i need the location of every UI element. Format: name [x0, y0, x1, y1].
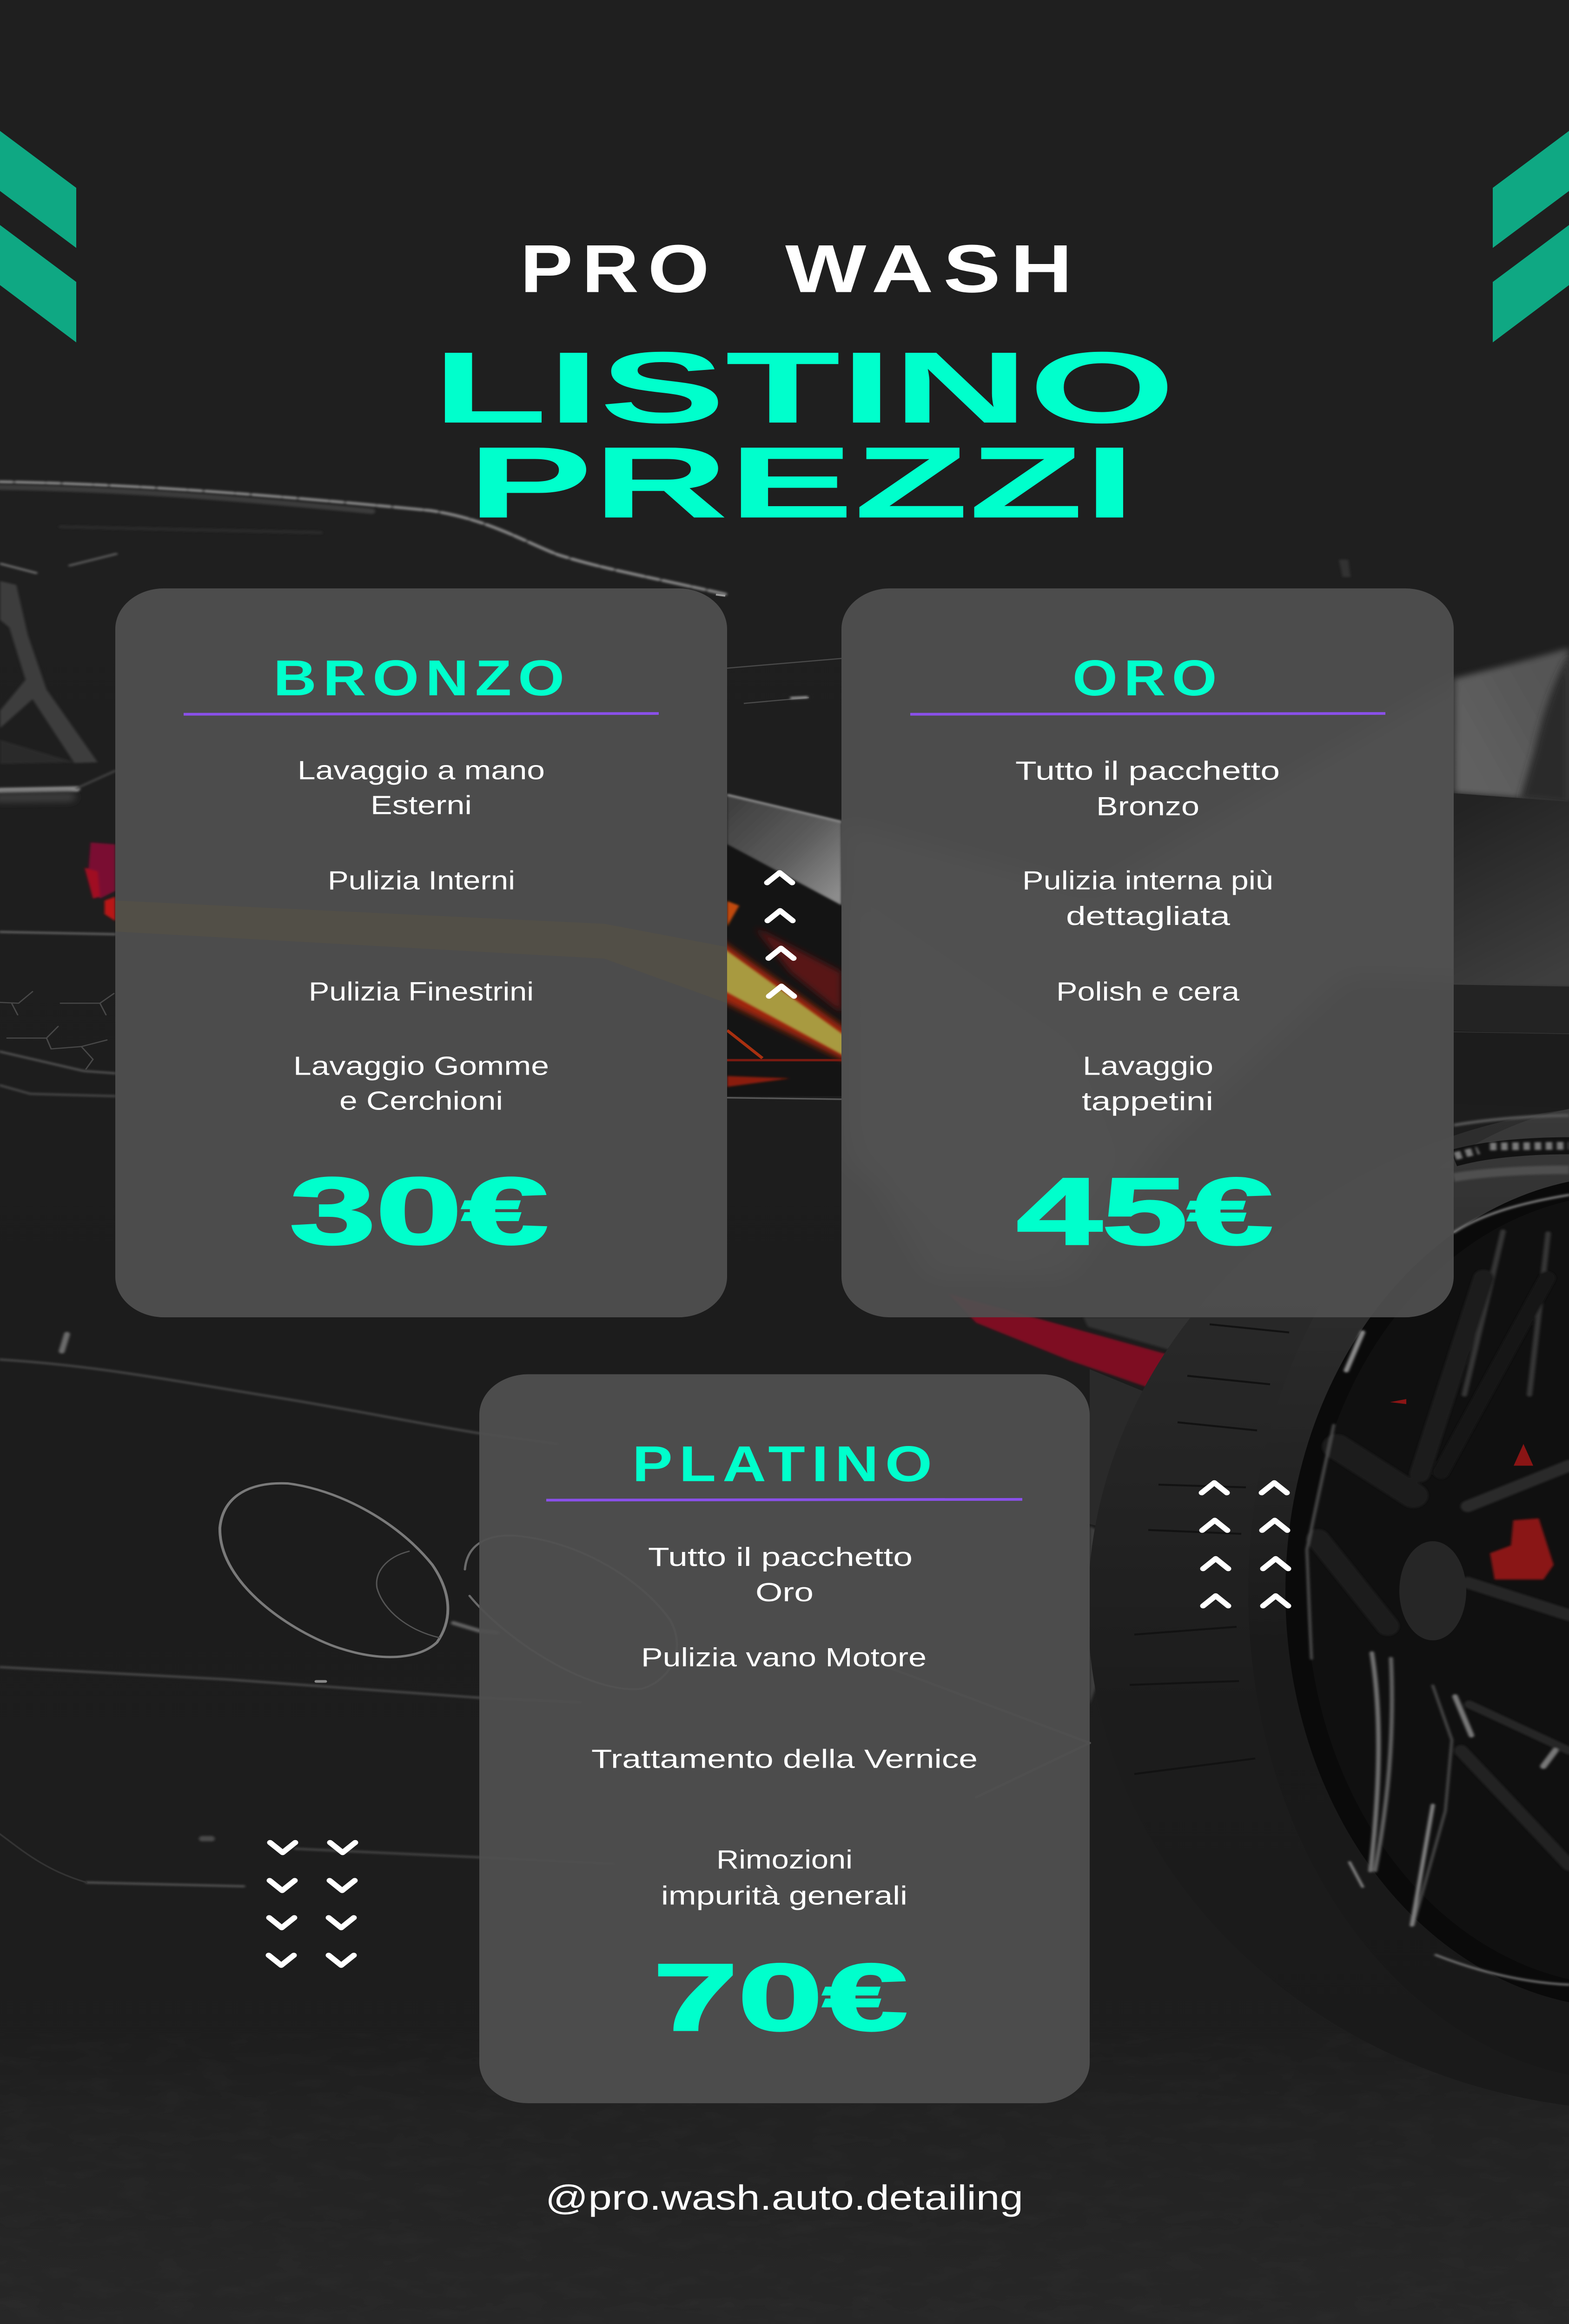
item: lavaggio gomme e cerchioni [293, 1051, 549, 1116]
panel: oro [841, 588, 1454, 1317]
title: PREZZI [467, 426, 1136, 539]
price: 30 euro: 30€ [290, 1158, 548, 1264]
icon: double chevrons down on left [269, 1842, 355, 1965]
exhaust and lower bumper lines [0, 1334, 1090, 1886]
icon: chevrons up between top cards [767, 873, 794, 996]
social handle: @pro.wash.auto.detailing [545, 2178, 1023, 2217]
title [432, 331, 1175, 539]
item: tutto il pacchetto bronzo [1015, 756, 1280, 821]
item: tutto il pacchetto bronzo: Tutto il pacchetto [1015, 756, 1280, 786]
item: polish e cera: Polish e cera [1056, 977, 1239, 1006]
fender and right body [1339, 560, 1569, 1108]
brand name: WASH [785, 231, 1082, 307]
upper thin lines between cards [716, 594, 841, 703]
item: lavaggio tappetini: Lavaggio [1083, 1051, 1213, 1081]
left body lines and tail-light [0, 771, 115, 1096]
decorative teal stripes top right [1493, 131, 1569, 343]
title: LISTINO [432, 331, 1175, 444]
light streak seen through card [115, 901, 727, 1003]
decorative teal stripes top left [0, 131, 76, 343]
rear wing carbon edge [0, 482, 725, 594]
item: pulizia interni: Pulizia Interni [328, 866, 515, 895]
heading: bronzo: BRONZO [273, 650, 571, 706]
panel: bronzo [115, 588, 727, 1317]
heading: platino: PLATINO [632, 1436, 939, 1492]
item: lavaggio tappetini: tappetini [1082, 1087, 1213, 1116]
wing support strut [0, 563, 98, 764]
panel: platino [479, 1374, 1090, 2103]
tail-light between cards [727, 793, 841, 1100]
item: pulizia interna più dettagliata: dettagliata [1066, 901, 1230, 931]
item: pulizia finestrini: Pulizia Finestrini [309, 977, 534, 1006]
item: tutto il pacchetto oro: Tutto il pacchetto [648, 1542, 913, 1572]
item: tutto il pacchetto bronzo: Bronzo [1096, 792, 1199, 821]
item: trattamento della vernice: Trattamento della Vernice [591, 1744, 978, 1774]
item: tutto il pacchetto oro [648, 1542, 913, 1607]
item: rimozioni impurità generali: Rimozioni [716, 1845, 853, 1875]
item: pulizia interna più dettagliata: Pulizia interna più [1022, 866, 1273, 895]
item: lavaggio tappetini [1082, 1051, 1213, 1116]
wheel rim with spokes and brake caliper [1285, 1175, 1569, 2008]
price: 70 euro: 70€ [653, 1944, 907, 2050]
item: tutto il pacchetto oro: Oro [755, 1578, 814, 1607]
faint car body behind oro card [841, 651, 1569, 1278]
item: lavaggio a mano esterni [298, 756, 545, 820]
item: pulizia vano motore: Pulizia vano Motore [641, 1643, 927, 1672]
icon: double chevrons up on tyre [1202, 1483, 1288, 1606]
brand name [520, 231, 1082, 307]
heading: oro: ORO [1072, 650, 1223, 706]
background: dark photo of sports car rear with wheel [0, 479, 1569, 2324]
price: 45 euro: 45€ [1017, 1158, 1273, 1264]
rear red reflector [948, 1294, 1204, 1704]
brand name: PRO [520, 231, 718, 307]
item: lavaggio gomme e cerchioni: Lavaggio Gomme [293, 1051, 549, 1081]
item: pulizia interna più dettagliata [1022, 866, 1273, 931]
item: lavaggio a mano esterni: Esterni [371, 791, 472, 820]
item: rimozioni impurità generali: impurità generali [661, 1881, 907, 1910]
tyre [1088, 1103, 1569, 2111]
item: lavaggio a mano esterni: Lavaggio a mano [298, 756, 545, 785]
item: rimozioni impurità generali [661, 1845, 907, 1910]
item: lavaggio gomme e cerchioni: e Cerchioni [339, 1086, 503, 1116]
